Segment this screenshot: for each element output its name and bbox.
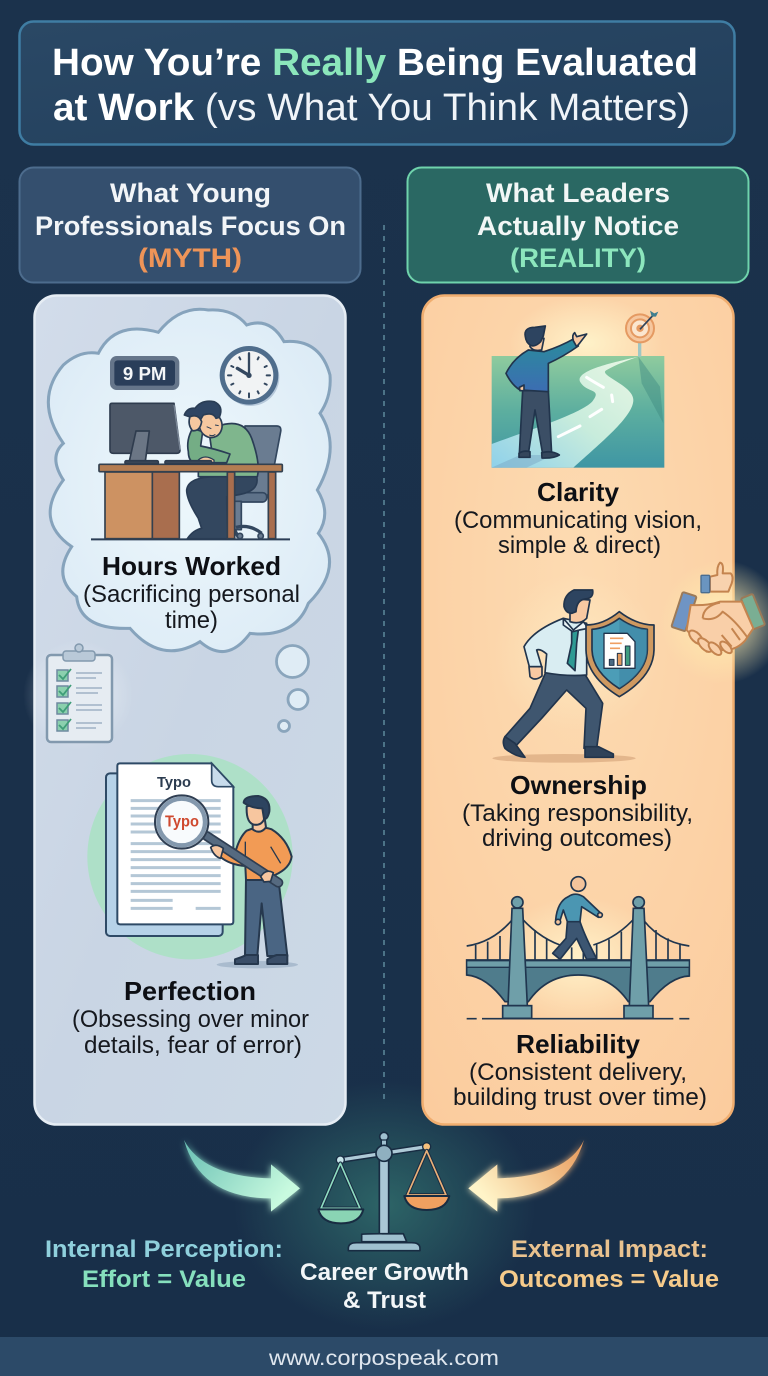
worker figure — [184, 401, 258, 539]
text: ownership: (Taking responsibility, — [462, 800, 693, 827]
header: reality: What Leaders — [486, 178, 670, 208]
header: reality: (REALITY) — [510, 243, 646, 273]
header: myth: What Young — [110, 178, 271, 208]
text: perfection — [72, 976, 309, 1059]
icon: glowing clipboard — [23, 640, 133, 750]
figure: reviewer — [215, 796, 298, 968]
footer — [0, 1337, 768, 1376]
text: internal perception: Effort = Value — [82, 1266, 246, 1293]
icon: clock — [220, 346, 279, 406]
hands on handle — [211, 845, 273, 882]
desk — [99, 464, 282, 539]
figure: walker — [553, 877, 602, 959]
text: reliability: building trust over time) — [453, 1084, 707, 1111]
title banner: How You’re Really Being Evaluated — [52, 42, 698, 84]
text: ownership — [462, 770, 693, 852]
text: perfection: Perfection — [124, 976, 256, 1006]
illustration: perfection: Typo — [157, 775, 191, 791]
text: ownership: Ownership — [510, 770, 647, 800]
text: clarity: simple & direct) — [498, 532, 661, 559]
text: hours worked — [83, 551, 300, 634]
illustration: bridge — [467, 877, 689, 1023]
text: clarity: Clarity — [537, 477, 620, 507]
thought cloud — [48, 309, 330, 652]
text: external impact: Outcomes = Value — [499, 1266, 719, 1293]
text: career growth: & Trust — [343, 1287, 426, 1314]
text: reliability: (Consistent delivery, — [469, 1059, 687, 1086]
glow behind scales — [235, 1080, 535, 1330]
arrow: right to scales — [468, 1140, 584, 1212]
monitor — [110, 403, 212, 464]
text: perfection: (Obsessing over minor — [72, 1006, 309, 1033]
text: career growth: Career Growth — [300, 1259, 469, 1286]
thought bubbles — [276, 646, 308, 732]
icon: shield — [586, 612, 654, 697]
illustration: perfection — [87, 754, 298, 968]
text: perfection: details, fear of error) — [84, 1032, 302, 1059]
text: external impact — [499, 1236, 719, 1293]
text: reliability: Reliability — [516, 1029, 641, 1059]
text: internal perception: Internal Perception: — [45, 1236, 283, 1263]
title banner — [20, 22, 734, 144]
figure: leader pointing — [506, 326, 587, 458]
panel: reality — [422, 296, 734, 1124]
header: myth — [20, 168, 360, 282]
text: clarity: (Communicating vision, — [454, 507, 702, 534]
chair — [210, 426, 281, 539]
text: hours worked: (Sacrificing personal — [83, 581, 300, 608]
icon: target — [626, 311, 658, 357]
icon: handshake and thumbs up — [660, 560, 768, 684]
text: career growth — [300, 1259, 469, 1314]
header: reality — [408, 168, 748, 282]
text: external impact: External Impact: — [511, 1236, 708, 1263]
text: reliability — [453, 1029, 707, 1111]
text: ownership: driving outcomes) — [482, 825, 672, 852]
floor — [91, 536, 290, 542]
badge: 9 PM — [110, 356, 179, 390]
title banner: at Work (vs What You Think Matters) — [53, 87, 690, 129]
badge: 9 PM: 9 PM — [123, 363, 166, 384]
panel: myth — [34, 296, 346, 1124]
figure: ownership with shield — [492, 590, 654, 763]
header: myth: (MYTH) — [138, 243, 242, 273]
icon: magnifier — [155, 795, 278, 883]
header: reality: Actually Notice — [477, 211, 679, 241]
text: hours worked: Hours Worked — [102, 551, 281, 581]
header: myth: Professionals Focus On — [35, 211, 346, 241]
icon: magnifier: Typo — [165, 814, 199, 831]
arrow: left to scales — [184, 1140, 300, 1212]
icon: balance scales — [318, 1132, 449, 1251]
text: hours worked: time) — [165, 607, 218, 634]
text: clarity — [454, 477, 702, 559]
text: internal perception — [45, 1236, 283, 1293]
illustration: clarity road — [492, 297, 664, 763]
footer: www.corpospeak.com — [268, 1347, 499, 1370]
illustration: desk worker — [91, 346, 290, 539]
center divider — [383, 225, 385, 1100]
